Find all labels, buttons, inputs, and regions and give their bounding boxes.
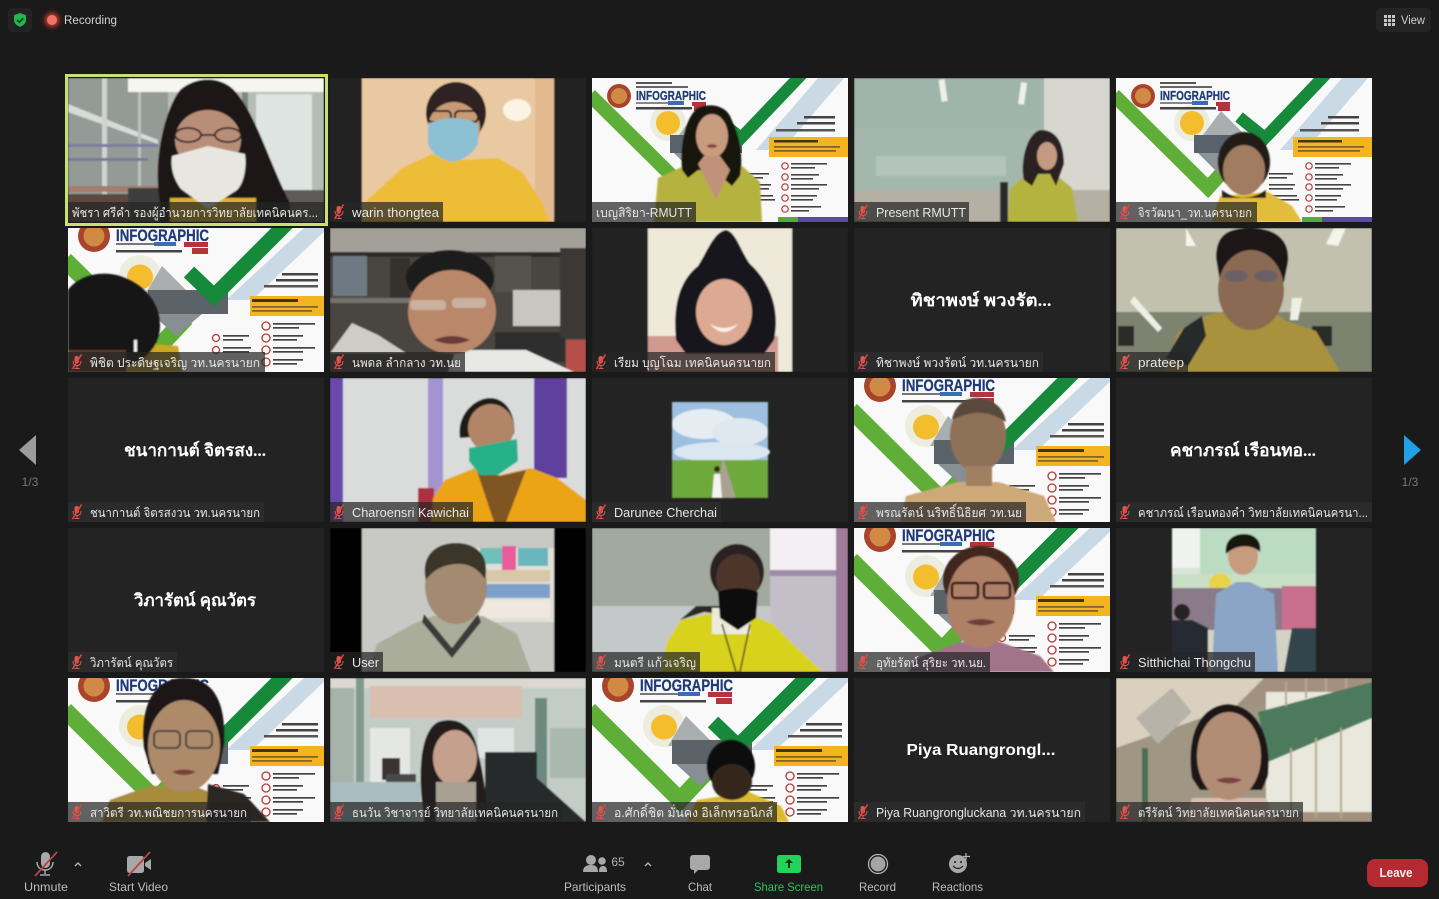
name tag: ชนากานต์ จิตรสงวน วท.นครนายก: [90, 506, 260, 520]
button: leave: Leave: [1380, 866, 1413, 880]
button: chat: Chat: [688, 880, 713, 894]
button: record: [859, 854, 896, 894]
display name: ทิชาพงษ์ พวงรัต...: [910, 290, 1052, 310]
name tag: [330, 352, 465, 372]
tile: presenter over poster: [590, 74, 848, 222]
poster background: INFOGRAPHIC: [636, 88, 706, 103]
button: unmute: [24, 852, 81, 894]
name tag: พิชิต ประดิษฐเจริญ วท.นครนายก: [90, 356, 260, 370]
button: record: Record: [859, 880, 896, 894]
name tag: [854, 202, 969, 222]
name tag: พรณรัตน์ นริทธิ์นิธิยศ วท.นย: [876, 503, 1022, 520]
name tag: [330, 202, 443, 222]
button: reactions: Reactions: [932, 880, 983, 894]
name tag: warin thongtea: [351, 206, 439, 220]
poster background: INFOGRAPHIC: [116, 676, 209, 695]
tile: warin thongtea: [330, 78, 556, 222]
tile: Charoensri Kawichai: [330, 378, 586, 522]
display name: ชนากานต์ จิตรสง...: [124, 440, 266, 460]
button: participants: Participants: [564, 880, 626, 894]
button: unmute: Unmute: [24, 880, 68, 894]
name tag: [1116, 502, 1372, 522]
person: [908, 546, 1054, 672]
top bar: security and recording: Recording: [64, 15, 117, 27]
name tag: Sitthichai Thongchu: [1138, 656, 1251, 670]
name tag: [68, 802, 251, 822]
name tag: จิรวัฒนา_วท.นครนายก: [1138, 206, 1252, 220]
tile: Darunee Cherchai: [592, 378, 848, 522]
button: leave: [1367, 859, 1428, 887]
profile photo: [672, 402, 770, 498]
name tag: ตรีรัตน์ วิทยาลัยเทคนิคนครนายก: [1138, 806, 1299, 820]
name tag: [330, 652, 383, 672]
photo: [330, 528, 586, 672]
person: [687, 740, 789, 822]
name tag: ธนวัน วิชาจารย์ วิทยาลัยเทคนิคนครนายก: [352, 806, 558, 820]
photo: [854, 78, 1110, 222]
person: [68, 274, 182, 372]
tile: ธนวัน: [330, 678, 586, 822]
poster background: [65, 670, 328, 822]
tile: active speaker with highlight border: [66, 76, 326, 224]
name tag: [592, 202, 696, 222]
name tag: [592, 502, 721, 522]
button: participants: 65: [611, 855, 625, 869]
poster background: [65, 220, 328, 372]
poster background: INFOGRAPHIC: [116, 226, 209, 245]
name tag: เรียม บุญโฉม เทคนิคนครนายก: [614, 355, 771, 371]
tile: พรณรัตน์: [851, 370, 1114, 522]
tile: อ.ศักดิ์ชิต: [589, 670, 852, 822]
profile photo: [1172, 528, 1316, 672]
name tag: prateep: [1138, 356, 1184, 370]
photo: [330, 378, 586, 522]
name tag: [854, 502, 1026, 522]
tile: สาวิตรี: [65, 670, 328, 822]
arrow: previous page: [19, 435, 39, 489]
photo: [592, 528, 848, 672]
poster background: [1114, 74, 1372, 222]
name tag: [330, 502, 473, 522]
poster background: INFOGRAPHIC: [902, 526, 995, 545]
photo: [1116, 678, 1372, 822]
photo: [360, 78, 556, 222]
name tag: [592, 802, 777, 822]
name tag: มนตรี แก้วเจริญ: [614, 656, 696, 670]
button: start video: Start Video: [109, 880, 168, 894]
button: reactions: [932, 853, 983, 894]
poster background: [851, 370, 1114, 522]
name tag: [68, 352, 265, 372]
tile: คชาภรณ์ (camera off): [1116, 378, 1372, 522]
photo: [646, 228, 794, 372]
button: share screen: Share Screen: [754, 880, 823, 894]
name tag: [592, 352, 775, 372]
name tag: [1116, 652, 1255, 672]
name tag: Darunee Cherchai: [614, 506, 717, 520]
tile: มนตรี: [592, 528, 848, 672]
name tag: [1116, 802, 1303, 822]
tile: prateep: [1116, 228, 1372, 372]
name tag: อ.ศักดิ์ชิต มั่นคง อิเล็กทรอนิกส์: [614, 803, 773, 820]
tile: วิภารัตน์ (camera off): [68, 528, 324, 672]
tile: Present RMUTT: [854, 78, 1110, 222]
photo: [1116, 228, 1372, 372]
tile: พิชิต: [65, 220, 328, 372]
name tag: อุทัยรัตน์ สุริยะ วท.นย.: [876, 656, 986, 671]
view button: [1376, 8, 1431, 32]
tile: ชนากานต์ (camera off): [68, 378, 324, 522]
name tag: Charoensri Kawichai: [352, 506, 469, 520]
name tag: [68, 202, 324, 222]
tile: User: [330, 528, 586, 672]
name tag: คชาภรณ์ เรือนทองคำ วิทยาลัยเทคนิคนครนา...: [1138, 506, 1368, 520]
display name: คชาภรณ์ เรือนทอ...: [1170, 440, 1316, 460]
name tag: พัชรา ศรีคำ รองผู้อำนวยการวิทยาลัยเทคนิคนคร...: [72, 206, 318, 221]
name tag: ทิชาพงษ์ พวงรัตน์ วท.นครนายก: [876, 356, 1039, 370]
person: [900, 398, 1056, 522]
name tag: [854, 802, 1085, 822]
name tag: [1116, 352, 1188, 372]
tile: นพดล: [330, 228, 586, 372]
poster background: [851, 520, 1114, 672]
arrow: previous page: 1/3: [22, 475, 39, 489]
button: chat: [688, 855, 713, 894]
photo: [330, 678, 586, 822]
name tag: Piya Ruangrongluckana วท.นครนายก: [876, 806, 1081, 820]
poster background: INFOGRAPHIC: [1160, 88, 1230, 103]
name tag: นพดล ลำกลาง วท.นย: [352, 356, 461, 370]
poster background: [589, 670, 852, 822]
tile: ทิชาพงษ์ (camera off): [854, 228, 1110, 372]
name tag: Present RMUTT: [876, 206, 966, 220]
name tag: [330, 802, 562, 822]
tile: Piya (camera off): [854, 678, 1110, 822]
person: [102, 678, 270, 822]
name tag: [854, 652, 990, 672]
photo: [330, 228, 586, 372]
tile: Sitthichai Thongchu: [1116, 528, 1372, 672]
person: [654, 105, 762, 222]
tile: เรียม: [592, 228, 794, 372]
name tag: User: [352, 656, 379, 670]
person: [1212, 132, 1302, 222]
top bar: security and recording: [8, 8, 117, 32]
name tag: [1116, 202, 1257, 222]
view button: View: [1401, 15, 1426, 27]
name tag: เบญสิริยา-RMUTT: [596, 206, 692, 220]
arrow: next page: [1402, 435, 1421, 489]
arrow: next page: 1/3: [1402, 475, 1419, 489]
name tag: [592, 652, 700, 672]
photo: [68, 78, 324, 222]
name tag: [68, 652, 177, 672]
name tag: สาวิตรี วท.พณิชยการนครนายก: [90, 806, 247, 820]
display name: วิภารัตน์ คุณวัตร: [134, 590, 257, 611]
tile: จิรวัฒนา: [1114, 74, 1372, 222]
name tag: วิภารัตน์ คุณวัตร: [90, 656, 173, 671]
poster background: [590, 74, 848, 222]
button: share screen: [754, 855, 823, 894]
display name: Piya Ruangrongl...: [906, 742, 1056, 759]
button: participants: [564, 855, 651, 894]
poster background: INFOGRAPHIC: [902, 376, 995, 395]
button: start video: [109, 852, 168, 894]
tile: ตรีรัตน์: [1116, 678, 1372, 822]
tile: อุทัยรัตน์: [851, 520, 1114, 672]
poster background: INFOGRAPHIC: [640, 676, 733, 695]
